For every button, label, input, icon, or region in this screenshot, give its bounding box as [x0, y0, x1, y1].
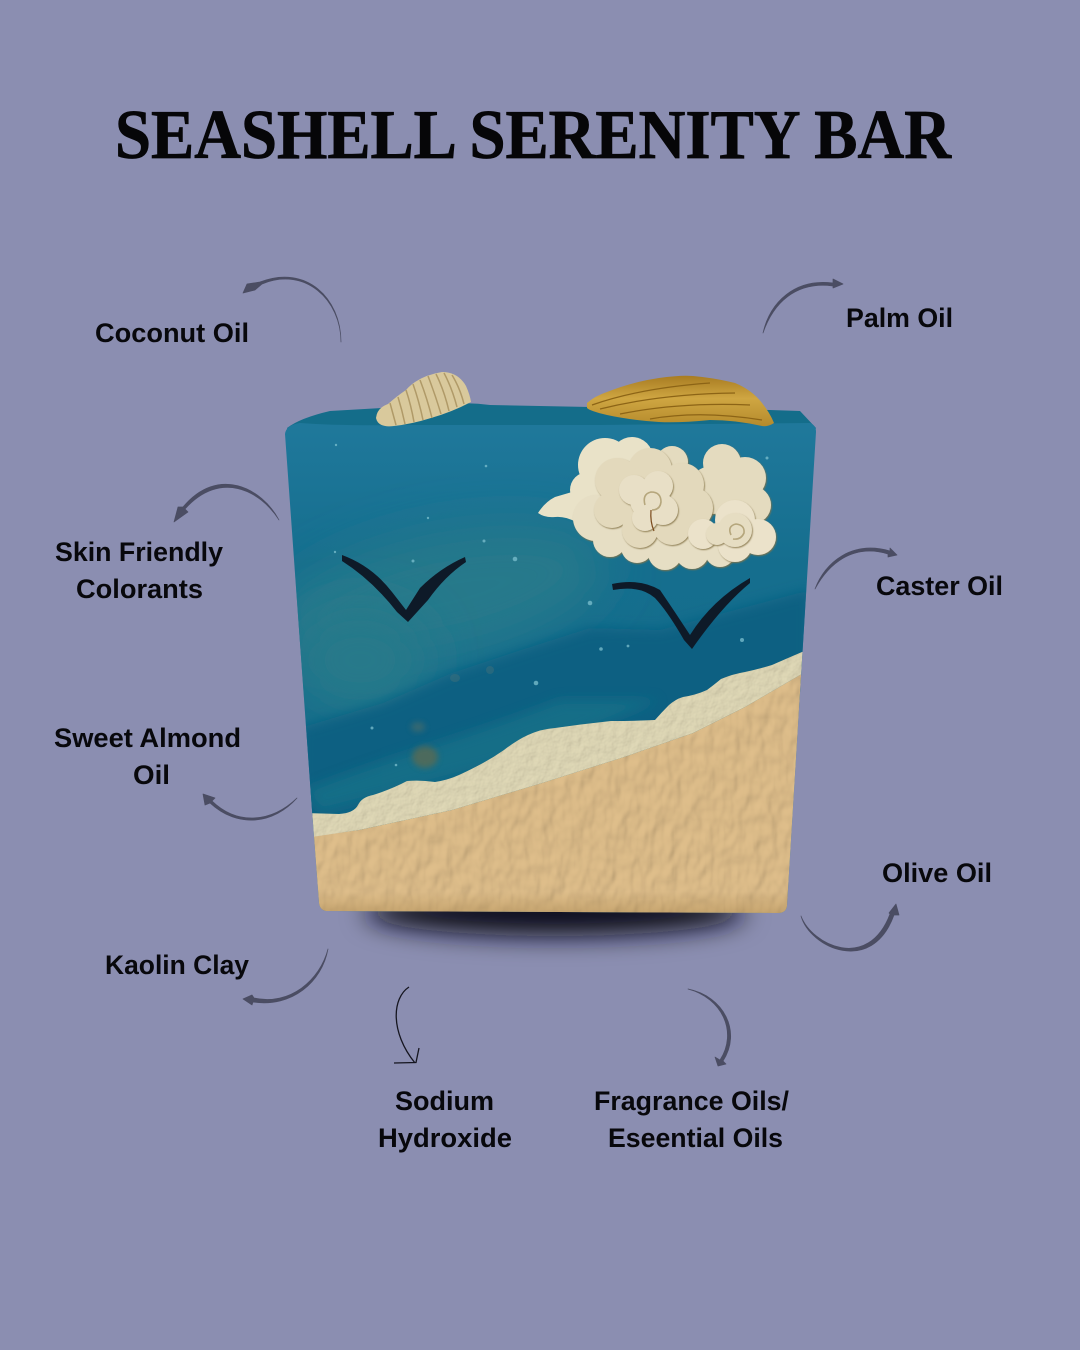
cloud right inner — [706, 513, 752, 547]
soap bar illustration — [261, 372, 820, 936]
arrow: kaolin clay — [243, 949, 328, 1005]
cloud lower left petals — [573, 494, 735, 570]
arrow: palm oil — [763, 279, 843, 333]
cloud swirl right — [730, 524, 744, 539]
label: olive oil: Olive Oil — [882, 858, 992, 888]
label: sodium hydroxide: Hydroxide — [378, 1123, 512, 1153]
label: skin friendly colorants: Colorants — [76, 574, 203, 604]
soap front ocean — [261, 415, 820, 920]
arrow: skin friendly colorants — [174, 484, 279, 522]
seashell left — [376, 372, 471, 426]
soap top surface — [287, 403, 816, 436]
seagull left — [342, 555, 466, 622]
label: sweet almond oil — [54, 723, 241, 790]
label: sodium hydroxide — [378, 1086, 512, 1153]
arrow: sweet almond oil — [203, 794, 297, 820]
label: fragrance and essential oils: Fragrance Oils/ — [594, 1086, 789, 1116]
label: coconut oil: Coconut Oil — [95, 318, 249, 348]
title: SEASHELL SERENITY BAR — [115, 97, 952, 174]
sea foam cloud — [538, 437, 776, 570]
label: skin friendly colorants — [55, 537, 223, 604]
cloud right flower — [688, 500, 776, 562]
arrow: coconut oil — [243, 277, 341, 342]
label: sodium hydroxide: Sodium — [395, 1086, 494, 1116]
cloud upper right petals — [656, 444, 771, 530]
label: sweet almond oil: Oil — [133, 760, 170, 790]
soap shadow — [365, 888, 745, 936]
label: palm oil: Palm Oil — [846, 303, 953, 333]
cloud main flower — [594, 448, 713, 548]
arrow: fragrance and essential oils — [688, 989, 731, 1066]
label: kaolin clay: Kaolin Clay — [105, 950, 249, 980]
cloud swirl left — [644, 492, 661, 510]
label: fragrance and essential oils: Eseential Oils — [608, 1123, 783, 1153]
label: sweet almond oil: Sweet Almond — [54, 723, 241, 753]
arrow: olive oil — [801, 904, 899, 951]
label: caster oil: Caster Oil — [876, 571, 1003, 601]
seashell right — [587, 376, 774, 426]
cloud base — [538, 437, 653, 522]
cloud inner flower — [619, 471, 678, 531]
seagull right — [612, 578, 750, 649]
foam layer — [305, 650, 815, 838]
arrow: caster oil — [815, 548, 897, 589]
cloud crack — [651, 510, 654, 531]
label: fragrance and essential oils — [594, 1086, 789, 1153]
label: skin friendly colorants: Skin Friendly — [55, 537, 223, 567]
sand layer — [314, 674, 802, 913]
arrow: sodium hydroxide — [394, 987, 419, 1063]
